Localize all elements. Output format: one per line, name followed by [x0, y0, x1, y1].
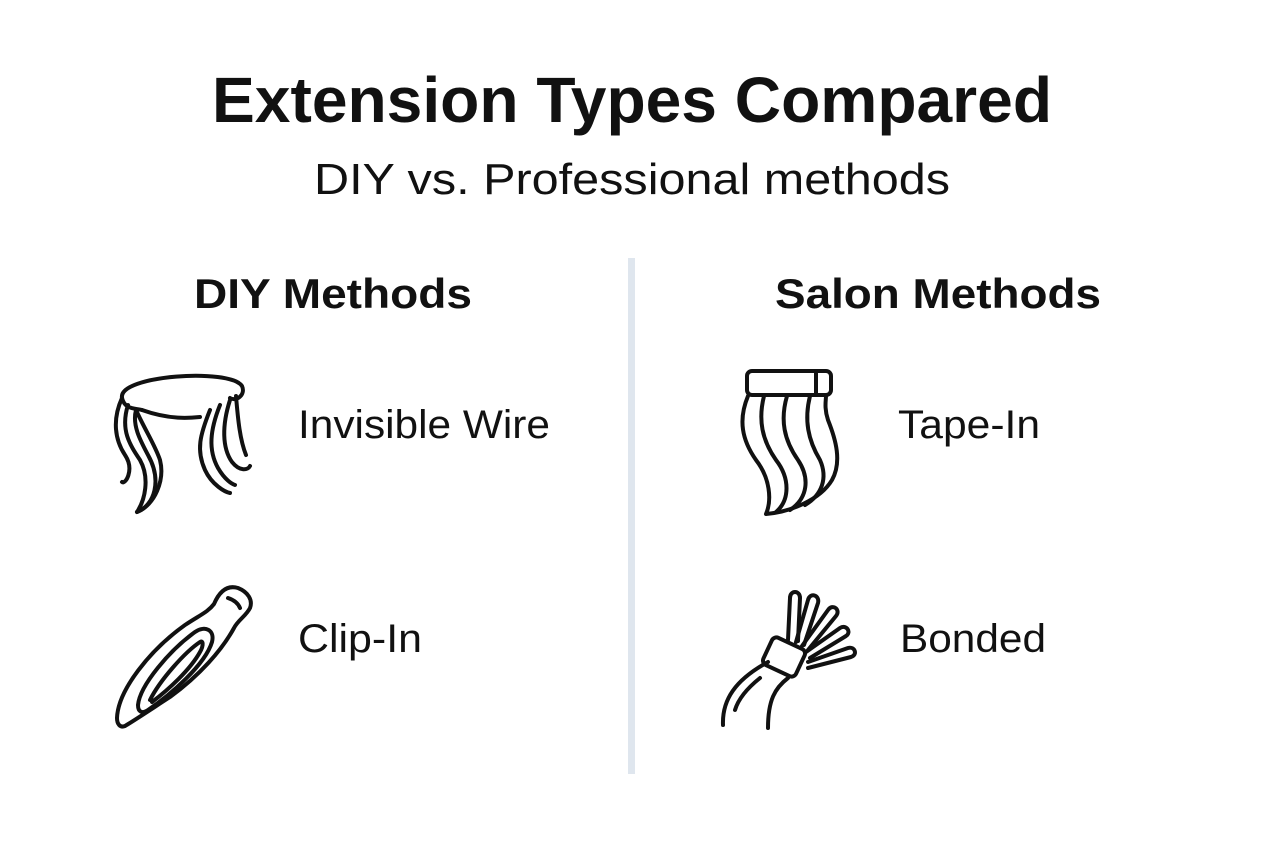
- heading: Salon Methods: Salon Methods: [775, 270, 1101, 317]
- divider: [628, 258, 635, 774]
- subtitle: DIY vs. Professional methods: [314, 155, 950, 204]
- icon: bonded: [723, 592, 855, 728]
- panel: Salon methods: [723, 270, 1101, 728]
- label: Invisible Wire: Invisible Wire: [298, 403, 550, 447]
- icon: invisible wire: [116, 376, 250, 512]
- label: Tape-In: Tape-In: [898, 403, 1040, 447]
- title: Extension Types Compared: [212, 64, 1052, 136]
- icon: clip-in: [117, 587, 251, 727]
- icon: tape-in: [742, 371, 837, 514]
- label: Clip-In: Clip-In: [298, 617, 422, 661]
- label: Bonded: Bonded: [900, 617, 1046, 661]
- heading: DIY Methods: DIY Methods: [194, 270, 472, 317]
- panel: DIY methods: [116, 270, 550, 727]
